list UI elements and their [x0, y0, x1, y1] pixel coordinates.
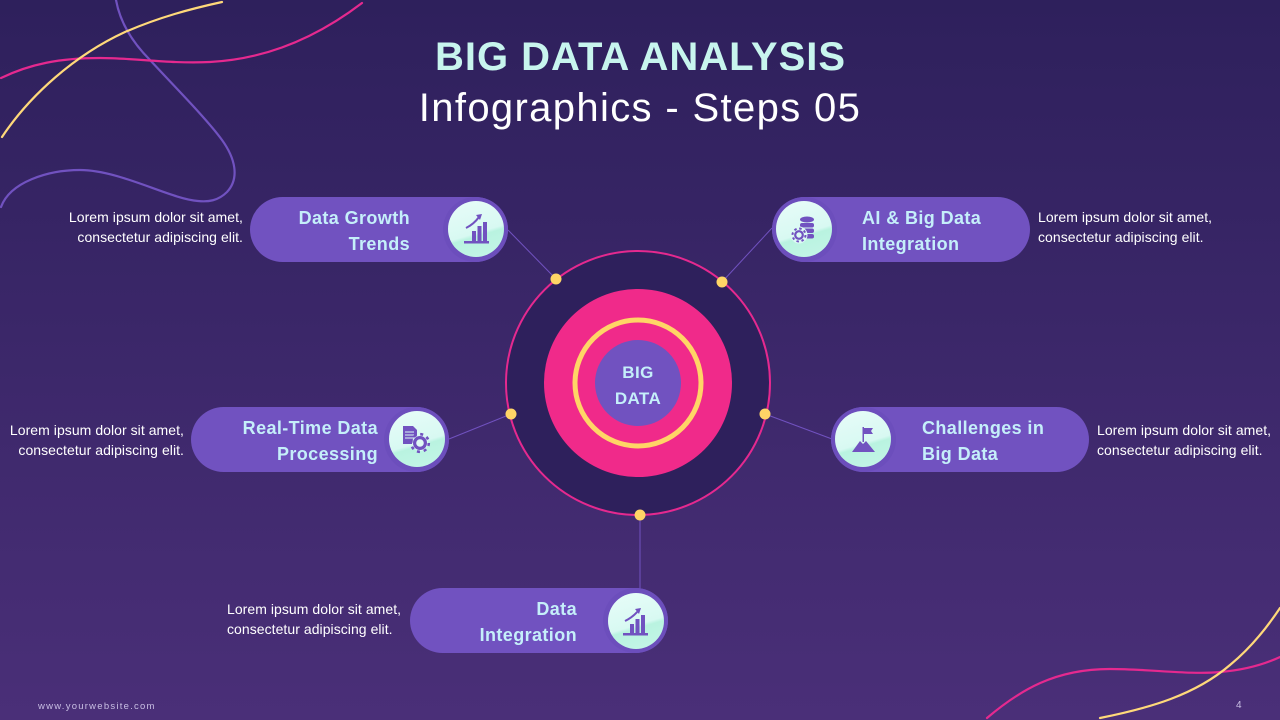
panel: Data Growth Trends: [250, 197, 508, 262]
footer website: www.yourwebsite.com: [37, 701, 156, 712]
page number: 4: [1236, 700, 1242, 711]
title: BIG DATA ANALYSIS: [435, 35, 846, 79]
icon: chart: [608, 593, 664, 649]
pill heading: Real-Time Data: [243, 418, 378, 438]
pill heading: Big Data: [922, 444, 999, 464]
panel: AI & Big Data Integration: [772, 197, 1030, 262]
subtitle: Infographics - Steps 05: [419, 86, 861, 130]
center label: DATA: [615, 389, 661, 408]
text: Data Integration description: Lorem ipsum dolor sit amet,: [227, 601, 401, 617]
decorative curves: bottom right: [987, 608, 1280, 718]
text: Data Growth description: Lorem ipsum dolor sit amet,: [69, 209, 243, 225]
text: Data Growth description: consectetur adipiscing elit.: [77, 229, 243, 245]
panel: Challenges in Big Data: [831, 407, 1089, 472]
pill heading: Data: [536, 599, 577, 619]
pill heading: Processing: [277, 444, 378, 464]
icon: document gear: [389, 411, 445, 467]
panel: Real-Time Data Processing: [191, 407, 449, 472]
text: Data Integration description: consectetur adipiscing elit.: [227, 621, 393, 637]
icon: database gear: [776, 201, 832, 257]
pill heading: Data Growth: [299, 208, 410, 228]
icon: growth chart: [448, 201, 504, 257]
center label: BIG: [622, 363, 654, 382]
pill heading: Challenges in: [922, 418, 1044, 438]
pill heading: AI & Big Data: [862, 208, 981, 228]
ring dots: [506, 274, 770, 520]
title: [419, 35, 861, 130]
pill heading: Integration: [862, 234, 959, 254]
text: Real-Time description: consectetur adipiscing elit.: [18, 442, 184, 458]
text: AI description: consectetur adipiscing elit.: [1038, 229, 1204, 245]
pink ring: [544, 289, 732, 477]
decorative curves: top left: [1, 0, 362, 207]
center circle: [595, 340, 681, 426]
connector lines: [449, 228, 832, 590]
text: Real-Time description: Lorem ipsum dolor sit amet,: [10, 422, 184, 438]
text: AI description: Lorem ipsum dolor sit amet,: [1038, 209, 1212, 225]
text: Challenges description: Lorem ipsum dolor sit amet,: [1097, 422, 1271, 438]
pill heading: Integration: [480, 625, 577, 645]
pill heading: Trends: [349, 234, 410, 254]
text: Challenges description: consectetur adipiscing elit.: [1097, 442, 1263, 458]
icon: mountain flag: [835, 411, 891, 467]
panel: Data Integration: [410, 588, 668, 653]
central diagram: [506, 251, 770, 515]
yellow ring: [575, 320, 701, 446]
